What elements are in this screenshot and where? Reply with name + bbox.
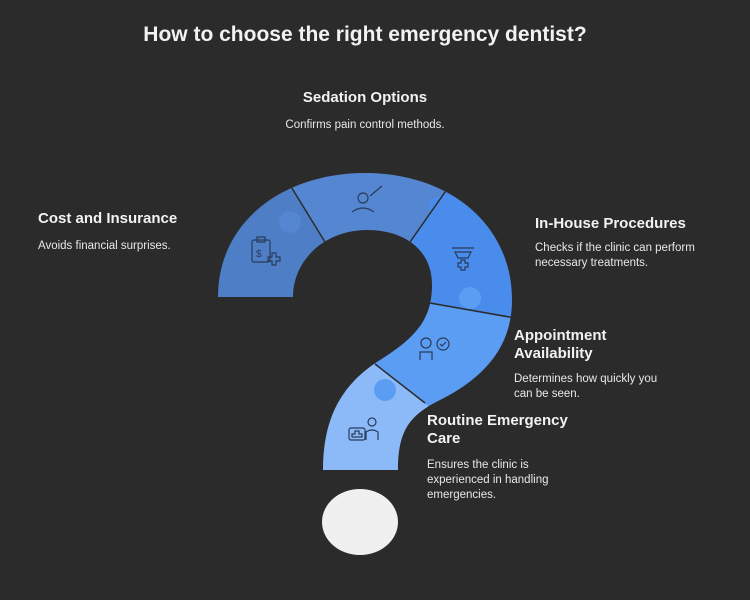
piece: sedation [279,173,446,242]
piece: in-house [410,192,512,318]
cost text: Avoids financial surprises. [38,240,171,252]
icon: medkit person [349,418,378,440]
routine text: Ensures the clinic is [427,459,529,471]
appointment text: Availability [514,345,593,362]
in-house text: In-House Procedures [535,215,686,232]
in-house text: Checks if the clinic can perform [535,242,695,254]
icons [252,186,474,440]
sedation text [285,89,445,131]
appointment text: Appointment [514,327,606,344]
appointment text: can be seen. [514,388,580,400]
piece: appointment [374,287,510,406]
dot of question mark [322,489,398,555]
in-house text: necessary treatments. [535,257,648,269]
question mark graphic [218,173,512,555]
in-house text [535,215,695,269]
cost text [38,210,177,252]
icon: clipboard dollar: $ [256,249,262,260]
icon: person check [420,338,449,360]
piece: cost [218,188,325,297]
appointment text [514,327,657,400]
routine text: Routine Emergency [427,412,568,429]
cost text: Cost and Insurance [38,210,177,227]
sedation text: Confirms pain control methods. [285,119,445,131]
icon: sedation [352,186,382,212]
routine text: Care [427,430,460,447]
routine text: emergencies. [427,489,496,501]
title: How to choose the right emergency dentist? [143,23,587,46]
sedation text: Sedation Options [303,89,427,106]
icon: clipboard dollar [252,237,280,265]
icon: drone [452,248,474,270]
appointment text: Determines how quickly you [514,373,657,385]
routine text: experienced in handling [427,474,548,486]
routine text [427,412,568,501]
piece: routine [323,364,429,470]
